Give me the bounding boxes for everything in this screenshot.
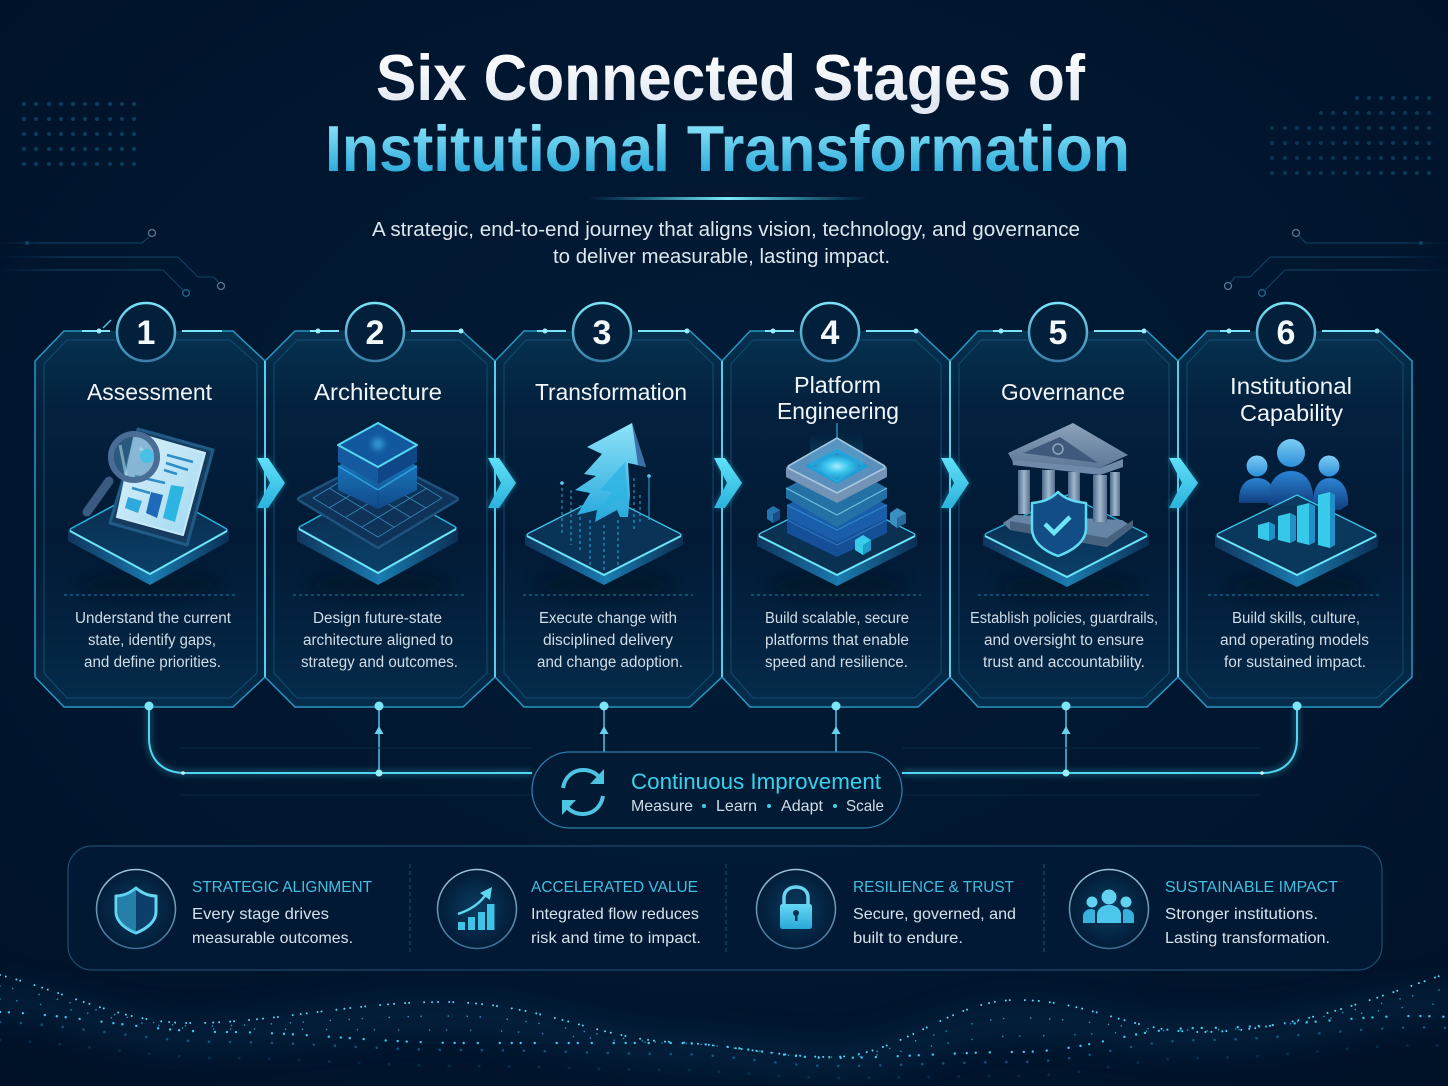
description: Establish policies, guardrails, [970,610,1158,627]
shared card edges [265,361,1178,677]
icon: team and growth bars on platform [1215,439,1378,599]
divider [64,594,236,596]
arrow: stage 1 to 2 [257,458,285,508]
description: Design future-state [313,610,442,627]
description: platforms that enable [765,632,909,649]
description [765,610,909,671]
description: Build skills, culture, [1232,610,1360,627]
heading: architecture: Architecture [314,379,442,405]
icon: server stack on platform [757,423,917,598]
dot grid: top left [22,102,136,166]
stage 4 card [722,303,950,707]
benefit: accelerated value: risk and time to impact. [531,930,701,947]
description: Build scalable, secure [765,610,909,627]
benefit: accelerated value: Integrated flow reduces [531,906,699,923]
heading: continuous improvement: Continuous Improvement [631,769,881,794]
arrow: stage 5 to 6 [1169,458,1198,508]
number badge 4: 4 [821,314,840,352]
connector nodes on cards [144,702,1302,710]
icon: layered blueprint stack [297,423,458,597]
circuit traces: right [1224,230,1448,296]
benefit: resilience and trust: RESILIENCE & TRUST [853,879,1014,896]
heading: assessment: Assessment [87,379,213,405]
heading: institutional capability: Institutional [1230,373,1352,399]
panel: benefits [68,846,1382,970]
description: trust and accountability. [983,654,1145,671]
icon: report under magnifying glass on platform [68,429,229,597]
panel: continuous improvement [532,752,902,828]
benefit: sustainable impact: Stronger institutions. [1165,906,1318,923]
stage 2 card [265,303,495,707]
benefit: strategic alignment: STRATEGIC ALIGNMENT [192,879,372,896]
description [537,610,683,671]
description: speed and resilience. [765,654,908,671]
description: state, identify gaps, [88,632,216,649]
steps: measure, learn, adapt, scale: Adapt [781,798,824,815]
number badge 2: 2 [366,314,384,352]
stage 6 card [1178,303,1412,707]
benefit: strategic alignment: Every stage drives [192,906,329,923]
description: and define priorities. [84,654,221,671]
steps: measure, learn, adapt, scale [631,798,884,815]
stage 1 card [35,303,265,707]
description: strategy and outcomes. [301,654,458,671]
description: and operating models [1220,632,1369,649]
circuit traces: left [0,230,224,296]
divider [523,594,693,596]
heading: transformation: Transformation [535,379,687,405]
number badge 3: 3 [593,314,611,352]
particle wave [0,973,1448,1078]
description [75,610,232,671]
heading: institutional capability: Capability [1240,400,1344,426]
benefit: strategic alignment: measurable outcomes. [192,930,353,947]
number badge 5 [1029,303,1087,361]
connector: continuous improvement rail [149,707,1297,795]
arrow: stage 4 to 5 [941,458,969,508]
dot grid: top right [1270,96,1431,175]
number badge 6 [1257,303,1315,361]
title [325,41,1130,185]
benefit: sustainable impact [1070,870,1338,948]
title: Institutional Transformation [325,112,1130,185]
number badge 1: 1 [137,314,155,352]
number badge 2 [346,303,404,361]
arrow: stage 3 to 4 [714,458,742,508]
description: and change adoption. [537,654,683,671]
subtitle [372,219,1080,268]
benefit: resilience and trust [756,870,1016,948]
description [1220,610,1369,671]
stage 3 card [495,303,722,707]
number badge 3 [573,303,631,361]
description: Understand the current [75,610,232,627]
heading: platform engineering: Engineering [777,398,899,424]
steps: measure, learn, adapt, scale: Learn [716,798,757,815]
benefit: resilience and trust: Secure, governed, and [853,906,1016,923]
steps: measure, learn, adapt, scale: Scale [846,798,884,815]
heading: platform engineering [777,372,899,424]
heading: institutional capability [1230,373,1352,426]
stage 5 card [950,303,1178,707]
divider [1208,594,1381,596]
heading: governance: Governance [1001,379,1125,405]
divider [978,594,1150,596]
description: for sustained impact. [1224,654,1366,671]
description: architecture aligned to [303,632,453,649]
icon: institution with shield [983,423,1149,599]
benefit: strategic alignment [96,870,372,948]
title: Six Connected Stages of [376,41,1085,114]
divider [751,594,921,596]
number badge 5: 5 [1049,314,1067,352]
icon: rising arrow on platform [525,423,683,597]
description [301,610,458,671]
benefit: accelerated value [438,870,701,948]
benefit: accelerated value: ACCELERATED VALUE [531,879,698,896]
benefit: sustainable impact: SUSTAINABLE IMPACT [1165,879,1338,896]
steps: measure, learn, adapt, scale: Measure [631,798,693,815]
number badge 6: 6 [1277,314,1295,352]
benefit: sustainable impact: Lasting transformation. [1165,930,1330,947]
heading: platform engineering: Platform [794,372,881,398]
divider [293,594,465,596]
description: disciplined delivery [543,632,673,649]
subtitle: A strategic, end-to-end journey that aligns vision, technology, and governance [372,219,1080,241]
benefit: resilience and trust: built to endure. [853,930,963,947]
arrow: stage 2 to 3 [488,458,516,508]
title underline glow [589,197,867,200]
icon: refresh cycle [562,769,604,815]
number badge 1 [117,303,175,361]
subtitle: to deliver measurable, lasting impact. [553,246,890,268]
description [970,610,1158,671]
description: Execute change with [539,610,677,627]
number badge 4 [801,303,859,361]
description: and oversight to ensure [984,632,1144,649]
